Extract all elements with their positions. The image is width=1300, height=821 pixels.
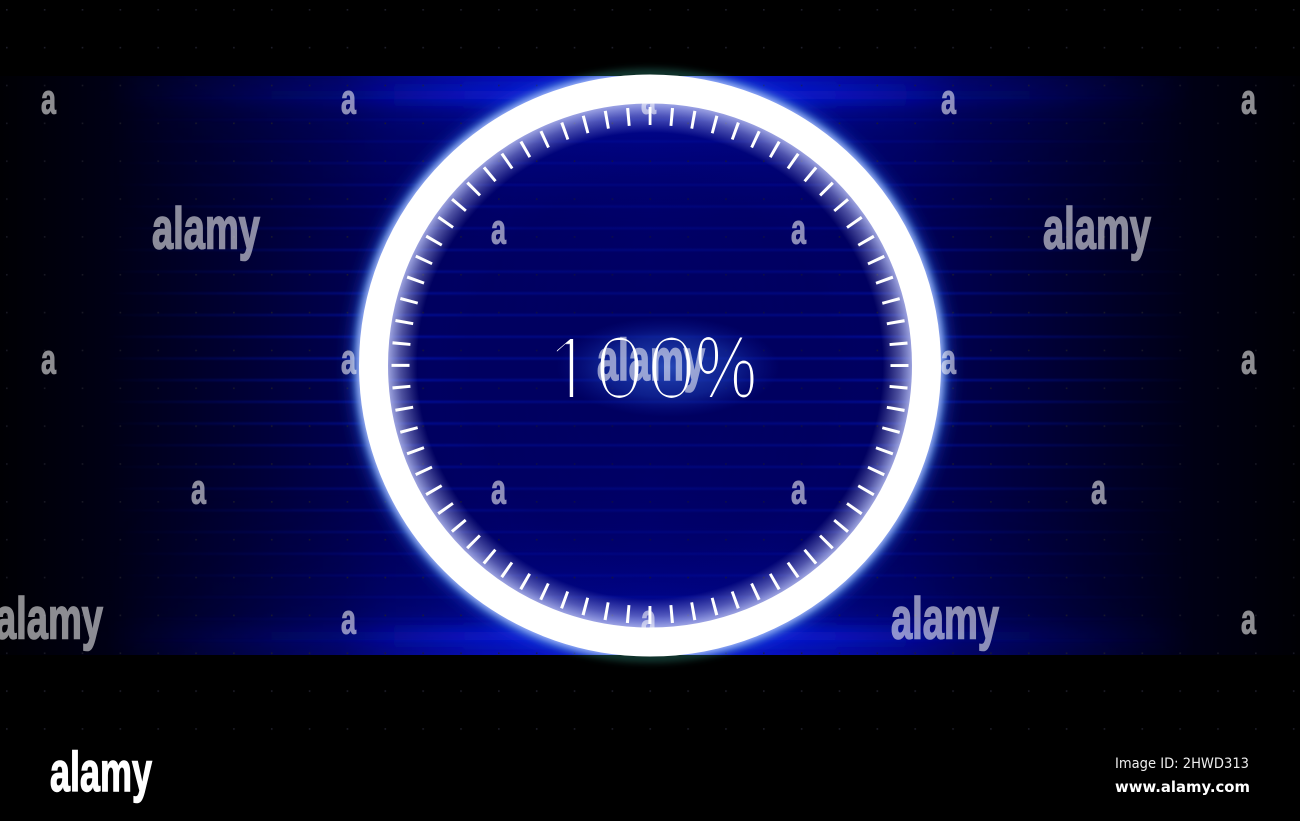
watermark: alamy large marks: alamy (152, 196, 260, 262)
alamy logo: alamy (50, 740, 152, 803)
watermark: alamy large marks: alamy (1043, 196, 1151, 262)
watermark: alamy large marks: alamy (597, 328, 705, 393)
watermark: small a marks: a (191, 466, 206, 512)
watermark: small a marks: a (641, 76, 656, 122)
watermark: small a marks: a (341, 76, 356, 122)
watermark: small a marks: a (1241, 596, 1256, 642)
watermark: small a marks: a (341, 336, 356, 382)
watermark: small a marks (41, 76, 1256, 642)
watermark: small a marks: a (1091, 466, 1106, 512)
inner dial halo (387, 102, 913, 628)
watermark: small a marks: a (791, 206, 806, 252)
watermark: alamy large marks: alamy (891, 586, 999, 652)
percentage value: 0 (647, 318, 696, 419)
watermark: small a marks: a (41, 336, 56, 382)
watermark: small a marks: a (491, 466, 506, 512)
white progress ring (374, 89, 926, 642)
watermark: small a marks: a (1241, 336, 1256, 382)
watermark: alamy large marks (0, 196, 1151, 652)
panel: blue band (0, 76, 1300, 655)
tick marks (400, 116, 900, 615)
watermark: small a marks: a (1241, 76, 1256, 122)
image id: Image ID: 2HWD313 (1115, 756, 1249, 772)
watermark: small a marks: a (791, 466, 806, 512)
website: www.alamy.com (1115, 778, 1250, 796)
watermark: small a marks: a (941, 336, 956, 382)
watermark: small a marks: a (641, 596, 656, 642)
watermark: small a marks: a (341, 596, 356, 642)
watermark: small a marks: a (941, 76, 956, 122)
percentage value: % (695, 317, 757, 417)
watermark: small a marks: a (491, 206, 506, 252)
ring glow (358, 74, 942, 658)
percentage value (556, 337, 754, 398)
watermark: small a marks: a (41, 76, 56, 122)
text glow (556, 317, 780, 417)
percentage value: 0 (595, 318, 644, 419)
inner dial disc (388, 104, 912, 628)
percentage value: 1 (547, 315, 593, 430)
